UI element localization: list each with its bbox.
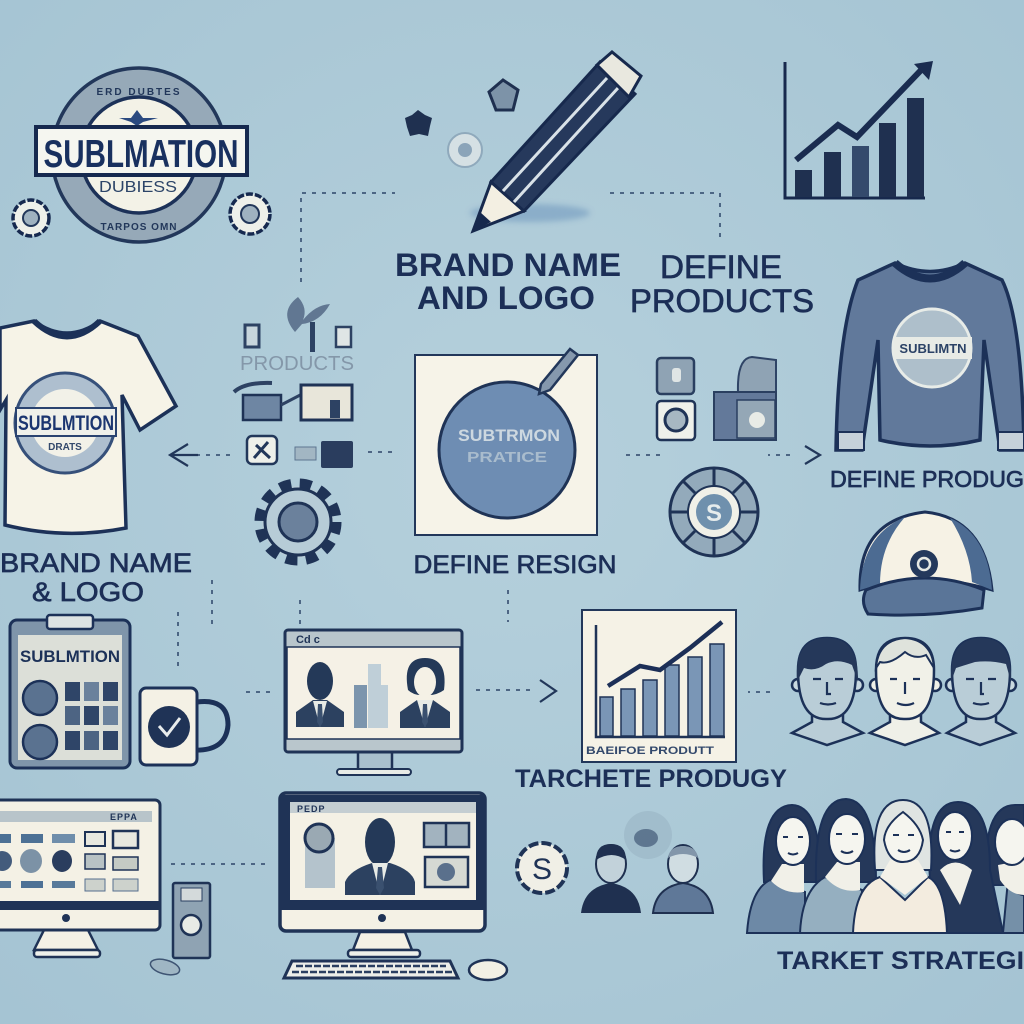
badge subtitle: DUBIESS bbox=[99, 179, 177, 196]
monitor: video call bbox=[285, 630, 462, 775]
heading: define products bbox=[630, 249, 814, 319]
label: brand name & logo: BRAND NAME bbox=[0, 548, 192, 578]
t-shirt bbox=[0, 321, 176, 533]
mug bbox=[140, 688, 228, 765]
mouse bbox=[469, 960, 507, 980]
icon: dollar dial bbox=[670, 468, 758, 556]
bar chart: top right bbox=[785, 61, 933, 198]
center design card bbox=[415, 349, 597, 535]
monitor title: Cd c bbox=[296, 634, 320, 646]
design circle: SUBTRMON bbox=[458, 426, 560, 445]
icon: soft circle bbox=[448, 133, 482, 167]
icon: eye blob bbox=[624, 811, 672, 859]
sublimation badge bbox=[36, 68, 247, 242]
businessman left bbox=[581, 844, 641, 913]
label: tarchete produgy: TARCHETE PRODUGY bbox=[515, 765, 787, 793]
products sketch bbox=[234, 297, 354, 420]
icon: large gear bbox=[262, 486, 334, 558]
woman 4 bbox=[929, 802, 1003, 933]
chart caption: BAEIFOE PRODUTT bbox=[586, 745, 714, 757]
icon: outlined shape bbox=[489, 80, 518, 110]
heading: define products: DEFINE bbox=[660, 249, 782, 285]
icon: dark flower bbox=[405, 110, 432, 136]
clipboard title: SUBLMTION bbox=[20, 647, 120, 666]
label: define produg: DEFINE PRODUG bbox=[830, 466, 1024, 492]
connector lines bbox=[170, 193, 790, 864]
heading: define products: PRODUCTS bbox=[630, 283, 814, 319]
mouse small bbox=[149, 956, 181, 978]
businessman right bbox=[653, 845, 713, 913]
face 2 bbox=[870, 638, 941, 745]
woman 3 bbox=[853, 800, 947, 933]
chart card bbox=[582, 610, 736, 762]
label: define resign: DEFINE RESIGN bbox=[414, 551, 616, 579]
icon: right gear bbox=[230, 194, 270, 234]
icon: dollar badge bbox=[517, 843, 567, 893]
badge emblem bbox=[119, 110, 158, 126]
monitor header text: PEDP bbox=[297, 804, 326, 814]
icon: dollar badge: S bbox=[532, 853, 552, 886]
icon: dollar dial: S bbox=[706, 500, 722, 527]
design circle bbox=[439, 382, 575, 518]
design circle: PRATICE bbox=[467, 449, 547, 466]
badge ring bottom text: TARPOS OMN bbox=[100, 222, 178, 233]
heading: brand name and logo: AND LOGO bbox=[417, 280, 595, 316]
sweatshirt bbox=[836, 263, 1024, 450]
badge banner bbox=[36, 127, 247, 176]
face 1 bbox=[792, 638, 863, 745]
heading: brand name and logo bbox=[395, 247, 621, 316]
badge ring top text: ERD DUBTES bbox=[96, 87, 182, 98]
device bbox=[173, 883, 210, 958]
monitor presenter bbox=[345, 818, 415, 895]
label: brand name & logo: & LOGO bbox=[32, 577, 144, 607]
t-shirt logo bbox=[15, 373, 116, 473]
woman 1 bbox=[747, 805, 820, 933]
group of women bbox=[747, 799, 1024, 933]
heading: brand name and logo: BRAND NAME bbox=[395, 247, 621, 283]
arrowheads bbox=[170, 444, 820, 702]
woman 5 bbox=[986, 805, 1024, 933]
person silhouette right bbox=[400, 658, 450, 728]
three faces bbox=[792, 638, 1016, 745]
monitor header text: EPPA bbox=[110, 812, 138, 822]
monitor: main bbox=[280, 793, 485, 957]
t-shirt logo: DRATS bbox=[48, 442, 82, 453]
monitor: left dashboard bbox=[0, 800, 160, 957]
t-shirt logo: SUBLMTION bbox=[18, 412, 114, 435]
small product icons bbox=[247, 436, 353, 468]
label: tarket strategy: TARKET STRATEGI bbox=[777, 947, 1024, 975]
icon: cap bbox=[860, 512, 992, 615]
sweatshirt logo bbox=[893, 309, 972, 387]
face 3 bbox=[946, 638, 1016, 745]
label: brand name & logo bbox=[0, 548, 192, 607]
sweatshirt logo: SUBLIMTN bbox=[899, 341, 967, 356]
products sketch label: PRODUCTS bbox=[240, 353, 354, 375]
icon: left gear bbox=[13, 200, 49, 236]
product icons right bbox=[657, 357, 776, 440]
clipboard bbox=[10, 615, 130, 768]
badge banner: SUBLMATION bbox=[44, 133, 238, 176]
person silhouette left bbox=[296, 662, 344, 727]
woman 2 bbox=[800, 799, 876, 933]
keyboard bbox=[284, 961, 458, 978]
icon: pencil bbox=[470, 52, 641, 231]
icon: design pen bbox=[539, 349, 578, 394]
